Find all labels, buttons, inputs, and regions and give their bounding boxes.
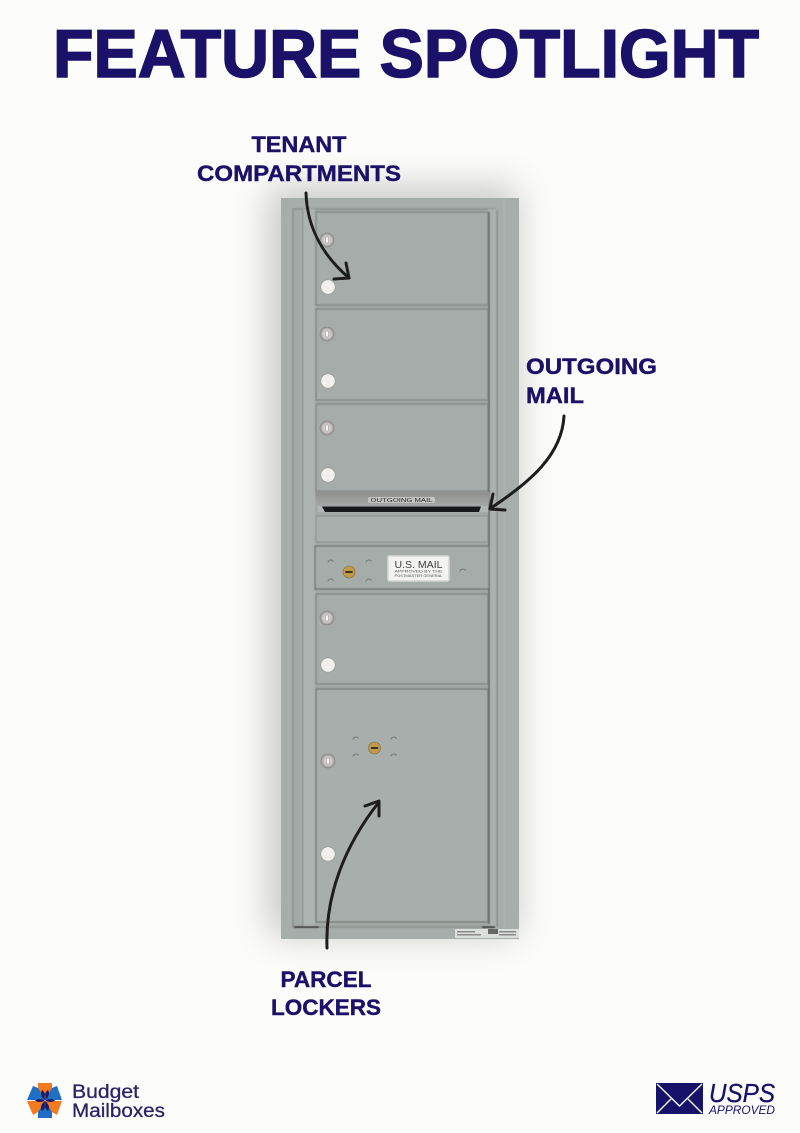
compliance label (455, 929, 519, 938)
label: tenant compartments (197, 132, 401, 186)
label: parcel lockers: LOCKERS (271, 995, 381, 1020)
parcel locker lock (353, 737, 396, 756)
label: outgoing mail: OUTGOING (526, 354, 657, 379)
logo text (72, 1081, 165, 1122)
label: outgoing mail: MAIL (526, 383, 584, 408)
label: parcel lockers (271, 967, 381, 1020)
label: outgoing mail (526, 354, 657, 408)
arrow: tenant compartments (306, 193, 349, 279)
logo mark (27, 1083, 62, 1118)
U.S. mail plate (388, 556, 449, 581)
logo: budget mailboxes (27, 1081, 165, 1122)
label: tenant compartments: TENANT (252, 132, 347, 157)
master lock panel (328, 560, 466, 582)
arrow: outgoing mail (490, 416, 564, 510)
arrow: parcel lockers (327, 801, 379, 948)
U.S. mail plate: APPROVED BY THE (394, 570, 443, 574)
title: FEATURE SPOTLIGHT (53, 16, 759, 92)
cabinet shadow (268, 186, 518, 936)
label: tenant compartments: COMPARTMENTS (197, 161, 401, 186)
inner frame (293, 199, 504, 927)
icon: envelope (656, 1083, 703, 1114)
usps wordmark: APPROVED (708, 1103, 775, 1117)
logo text: Budget (72, 1081, 140, 1103)
logo text: Mailboxes (72, 1100, 165, 1122)
door locks (320, 233, 335, 861)
mailbox unit (268, 186, 519, 939)
U.S. mail plate: POSTMASTER GENERAL (394, 574, 442, 578)
U.S. mail plate: U.S. MAIL (394, 559, 443, 571)
usps wordmark: USPS (709, 1078, 776, 1108)
outgoing mail slot (315, 492, 490, 512)
usps approved badge (656, 1078, 776, 1117)
cabinet body (281, 198, 519, 939)
outgoing mail slot: OUTGOING MAIL (370, 498, 432, 504)
label: parcel lockers: PARCEL (280, 967, 372, 992)
